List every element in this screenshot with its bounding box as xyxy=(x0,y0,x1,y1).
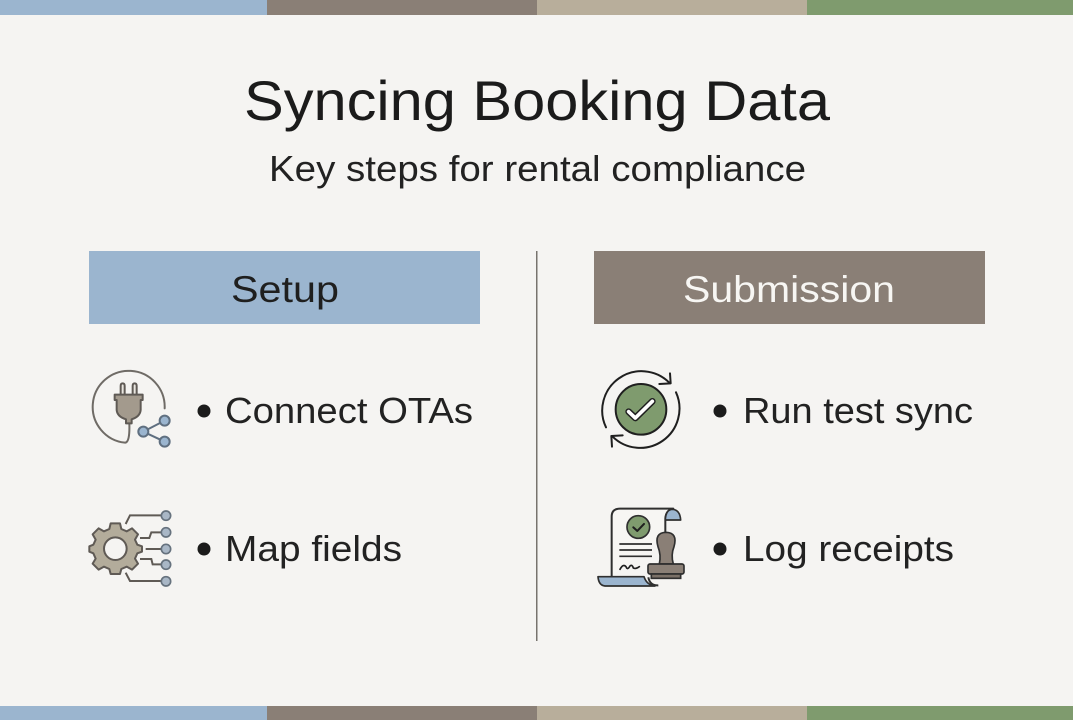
panel: setup xyxy=(89,251,480,586)
bottom colour band xyxy=(0,706,1073,720)
top colour band xyxy=(0,0,1073,15)
subtitle: Key steps for rental compliance xyxy=(269,148,806,189)
icon: document with stamp xyxy=(598,509,684,586)
icon: test sync check xyxy=(602,371,679,448)
icon: gear with data lines xyxy=(89,511,171,586)
heading: submission xyxy=(594,251,985,324)
title: Syncing Booking Data xyxy=(244,69,831,132)
panel: submission xyxy=(594,251,985,586)
step: map fields: Map fields xyxy=(225,528,402,569)
icon: plug with share nodes xyxy=(93,371,170,447)
heading: submission: Submission xyxy=(683,269,895,310)
step: connect OTAs: Connect OTAs xyxy=(225,390,473,431)
heading: setup xyxy=(89,251,480,324)
step: log receipts: Log receipts xyxy=(743,528,954,569)
heading: setup: Setup xyxy=(231,269,339,310)
step: run test sync: Run test sync xyxy=(743,390,973,431)
